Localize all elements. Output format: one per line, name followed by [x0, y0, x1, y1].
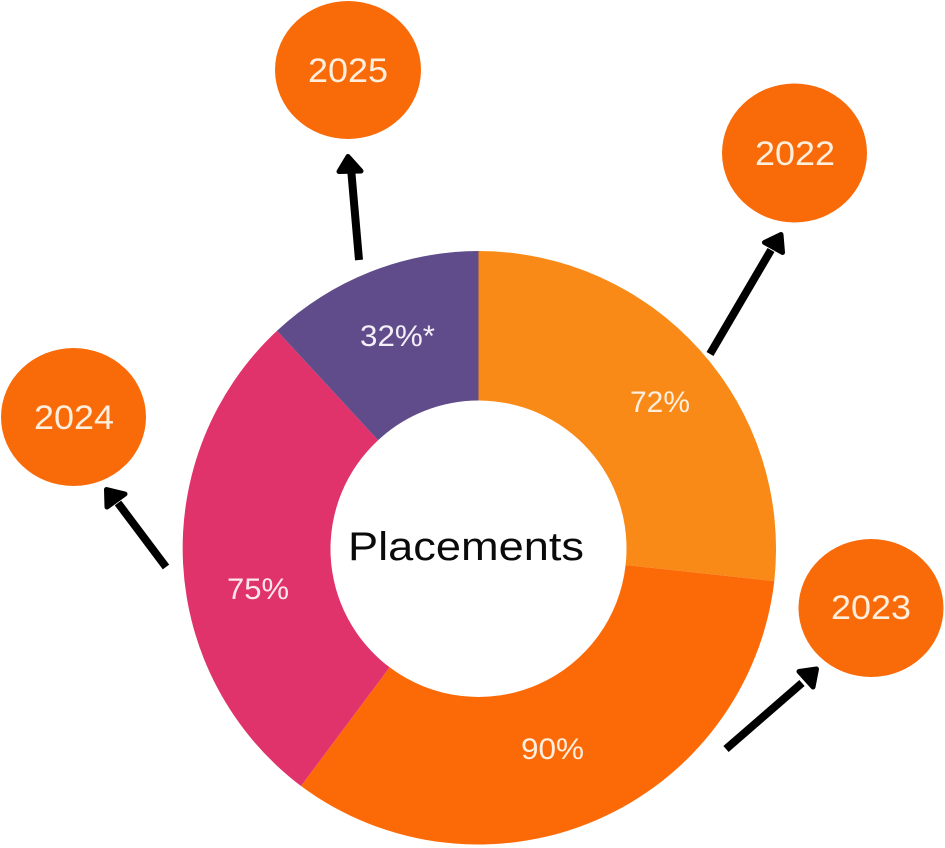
- arrow: to 2025: [339, 156, 361, 260]
- badge: 2025: 2025: [308, 52, 388, 90]
- value: 75%: 75%: [227, 573, 289, 606]
- badge: 2022: [722, 84, 867, 222]
- badge: 2023: 2023: [831, 589, 911, 627]
- value: 32%*: 32%*: [360, 320, 435, 353]
- segment: 2024 75%: [183, 331, 390, 786]
- badge: 2024: [1, 348, 146, 486]
- segment: 2022 72%: [478, 251, 776, 581]
- badge: 2023: [798, 539, 944, 677]
- arrow: to 2023: [726, 669, 816, 749]
- arrow: to 2022: [710, 234, 782, 354]
- segment: 2023 90%: [301, 565, 774, 844]
- badge: 2024: 2024: [34, 399, 114, 437]
- donut chart: [183, 251, 776, 844]
- badge: 2025: [275, 1, 421, 139]
- arrow: to 2024: [106, 490, 166, 567]
- value: 90%: 90%: [521, 733, 584, 766]
- badge: 2022: 2022: [755, 135, 835, 173]
- segment: 2025 32%: [277, 251, 478, 440]
- value: 72%: 72%: [630, 386, 690, 419]
- center label: Placements: [348, 525, 584, 569]
